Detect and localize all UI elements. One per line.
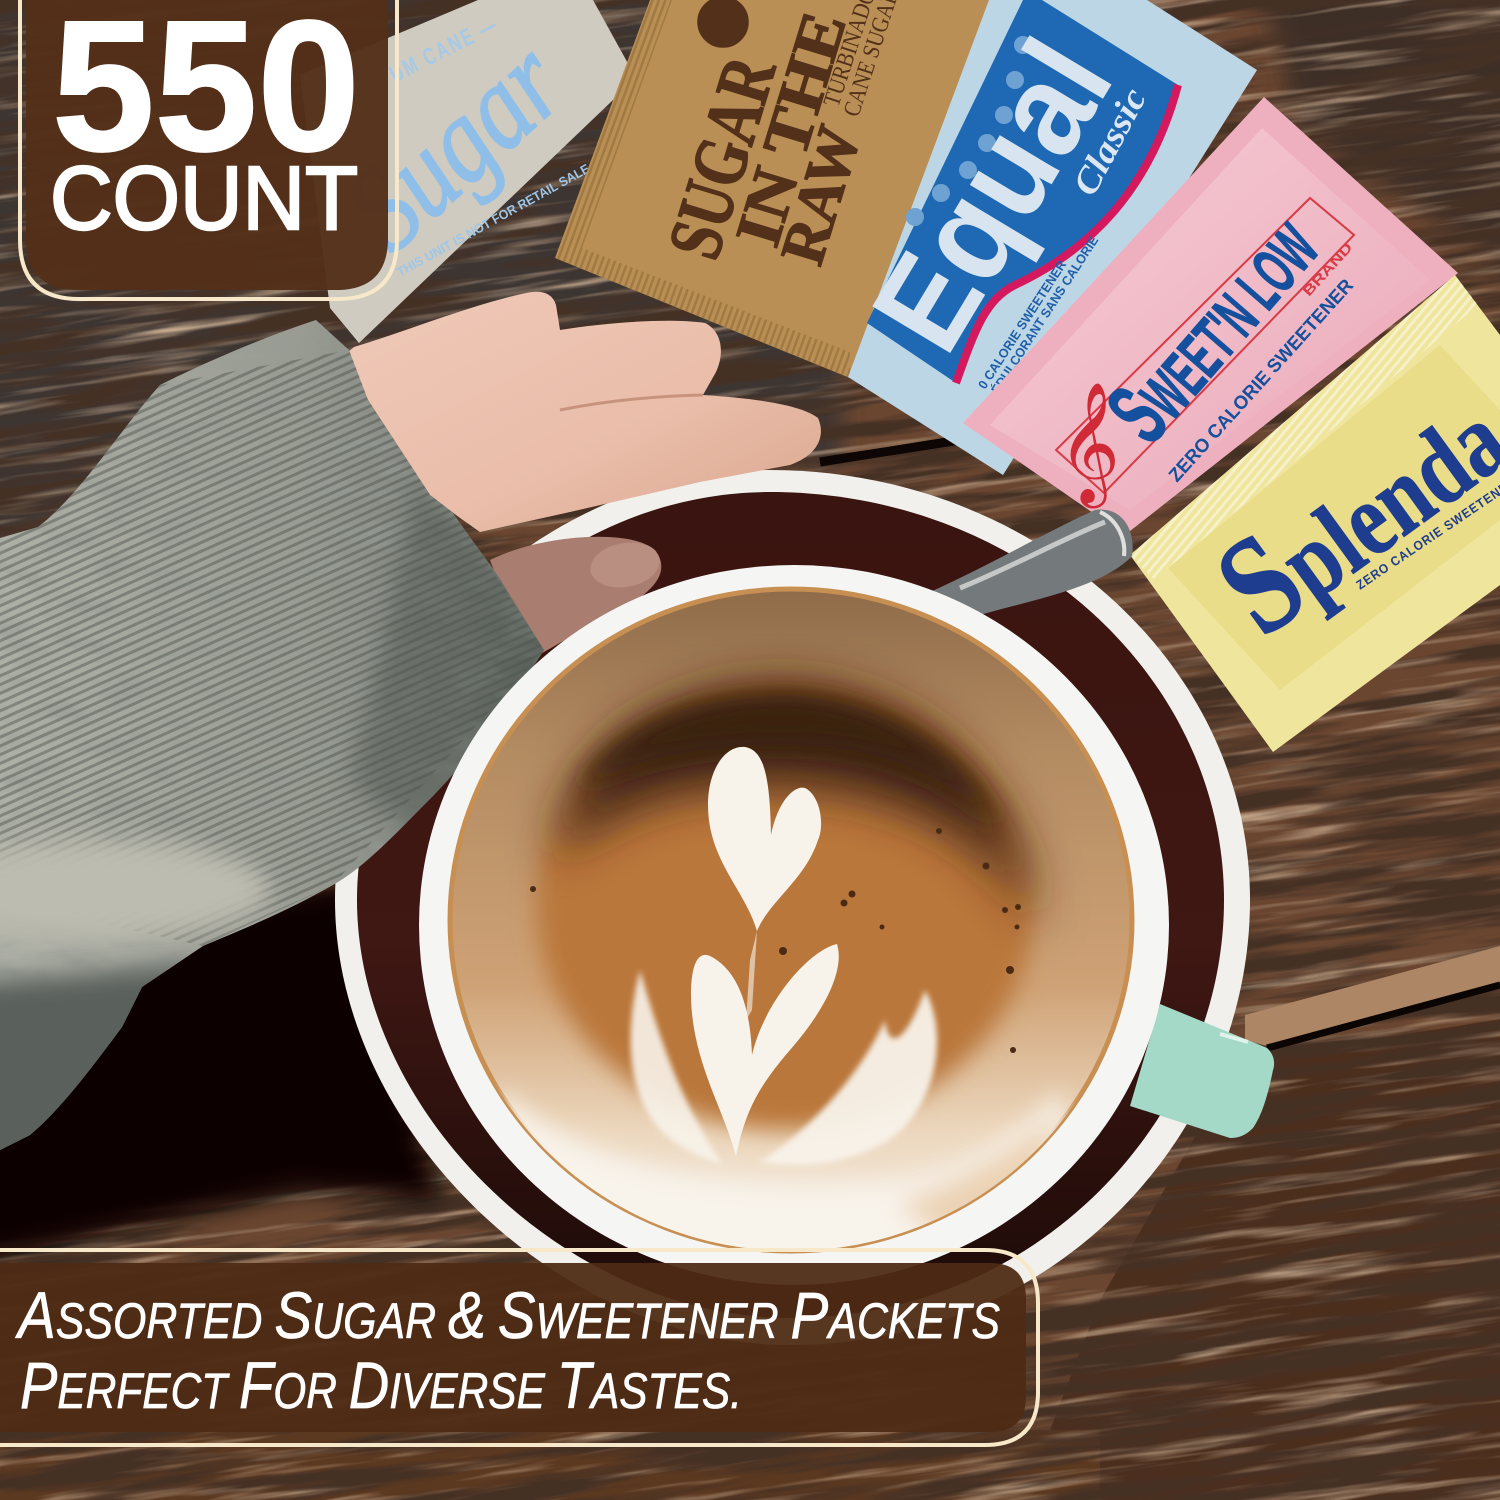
headline line 1: ASSORTED SUGAR & SWEETENER PACKETS	[15, 1278, 1000, 1352]
packet text: Sugar In The Raw	[652, 0, 904, 272]
packet text: Sweet'N Low: ZERO CALORIE SWEETENER	[1165, 275, 1358, 486]
coffee surface	[470, 680, 1100, 1280]
crema bubbles	[530, 828, 1021, 1053]
packet text: Equal: Classic	[1065, 81, 1154, 202]
cup	[419, 565, 1169, 1285]
latte art	[630, 747, 937, 1165]
packet text: Equal: Equal	[844, 16, 1140, 374]
count label: COUNT	[50, 149, 358, 249]
packet text: Equal: 0 CALORIE SWEETENER	[975, 257, 1070, 392]
packet: Equal	[844, 0, 1257, 475]
packet: Splenda	[1130, 275, 1500, 752]
packet: cane sugar	[300, 0, 636, 343]
packet text: Sweet'N Low: SWEET'N LOW	[1088, 196, 1337, 461]
hand	[335, 292, 821, 532]
packet text: Sugar In The Raw: RAW	[768, 118, 874, 272]
packet: Sweet'N Low	[963, 97, 1458, 535]
packet text: Sweet'N Low	[1058, 196, 1358, 509]
music staff	[1056, 198, 1354, 493]
headline line 2: PERFECT FOR DIVERSE TASTES.	[20, 1348, 742, 1422]
sleeve shading	[0, 350, 544, 1150]
packet text: Sweet'N Low: BRAND	[1299, 239, 1355, 299]
packet text: Sugar In The Raw: IN THE	[721, 4, 860, 254]
headline banner	[0, 1250, 1038, 1445]
thumb	[490, 537, 663, 660]
packet text: Equal: ÉDULCORANT SANS CALORIE	[988, 233, 1101, 397]
Equal dots	[906, 36, 1032, 226]
saucer	[335, 470, 1250, 1345]
count badge	[20, 0, 397, 299]
packet text: Sweet'N Low: 𝄞	[1058, 381, 1120, 509]
packet: Sugar In The Raw	[555, 0, 990, 378]
spoon	[930, 510, 1133, 618]
sleeve	[0, 320, 544, 1150]
mug handle	[1130, 1004, 1274, 1138]
packet text: cane sugar: THIS UNIT IS NOT FOR RETAIL SALE	[394, 161, 592, 280]
